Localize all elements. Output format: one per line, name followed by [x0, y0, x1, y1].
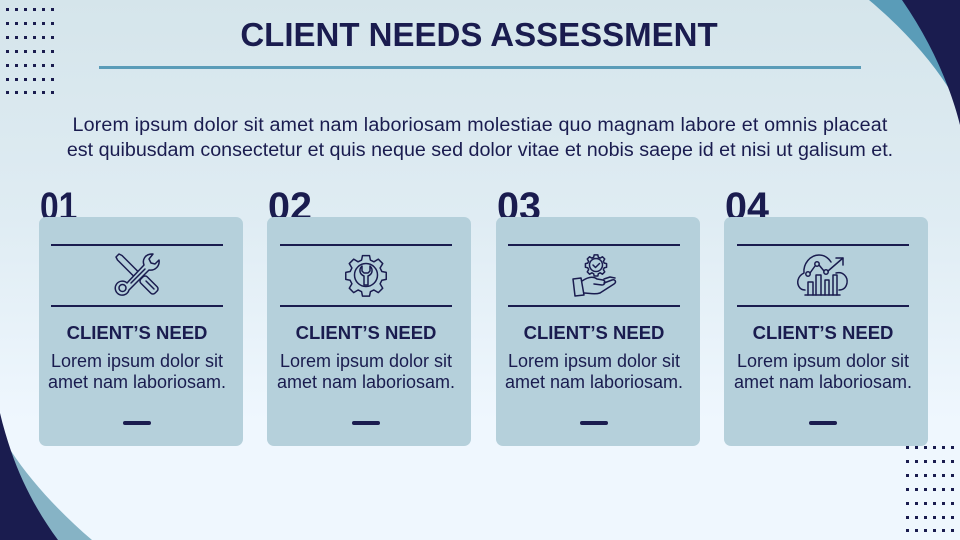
text 03: [505, 351, 683, 392]
card body 02: [267, 217, 471, 446]
number 02: 02: [268, 185, 312, 229]
text 03: Lorem ipsum dolor sit: [508, 351, 680, 371]
intro text: [67, 114, 893, 160]
number 03: 03: [497, 185, 541, 229]
text 01: [48, 351, 226, 392]
heading 03: CLIENT’S NEED: [524, 322, 664, 343]
card body 01: [39, 217, 243, 446]
number 04: 04: [725, 185, 769, 229]
icon: cloud with bar chart: [797, 254, 848, 296]
number 01: 01: [40, 185, 77, 229]
title: CLIENT NEEDS ASSESSMENT: [240, 16, 718, 53]
intro text: Lorem ipsum dolor sit amet nam laboriosam molestiae quo magnam labore et omnis placeat: [72, 114, 888, 136]
dot grid: bottom right: [906, 446, 954, 532]
panel: need 04: [724, 185, 928, 446]
intro text: est quibusdam consectetur et quis neque sed dolor vitae et nobis saepe id et nisi ut galisum et.: [67, 138, 893, 160]
text 03: amet nam laboriosam.: [505, 372, 683, 392]
icon: gear with wrench: [345, 254, 387, 297]
text 02: Lorem ipsum dolor sit: [280, 351, 452, 371]
panel: need 03: [496, 185, 700, 446]
top-right corner swoosh: [869, 0, 960, 125]
text 01: amet nam laboriosam.: [48, 372, 226, 392]
panel: need 01: [39, 185, 243, 446]
icon: hand holding gear: [572, 254, 616, 297]
text 04: Lorem ipsum dolor sit: [737, 351, 909, 371]
card body 03: [496, 217, 700, 446]
text 04: [734, 351, 912, 392]
icon: crossed wrench and screwdriver: [114, 253, 160, 296]
heading 02: CLIENT’S NEED: [296, 322, 436, 343]
panel: need 02: [267, 185, 471, 446]
bottom-left corner swoosh: [0, 413, 92, 540]
text 02: [277, 351, 455, 392]
card body 04: [724, 217, 928, 446]
text 04: amet nam laboriosam.: [734, 372, 912, 392]
text 02: amet nam laboriosam.: [277, 372, 455, 392]
heading 04: CLIENT’S NEED: [753, 322, 893, 343]
text 01: Lorem ipsum dolor sit: [51, 351, 223, 371]
dot grid: top left: [6, 8, 54, 94]
heading 01: CLIENT’S NEED: [67, 322, 207, 343]
